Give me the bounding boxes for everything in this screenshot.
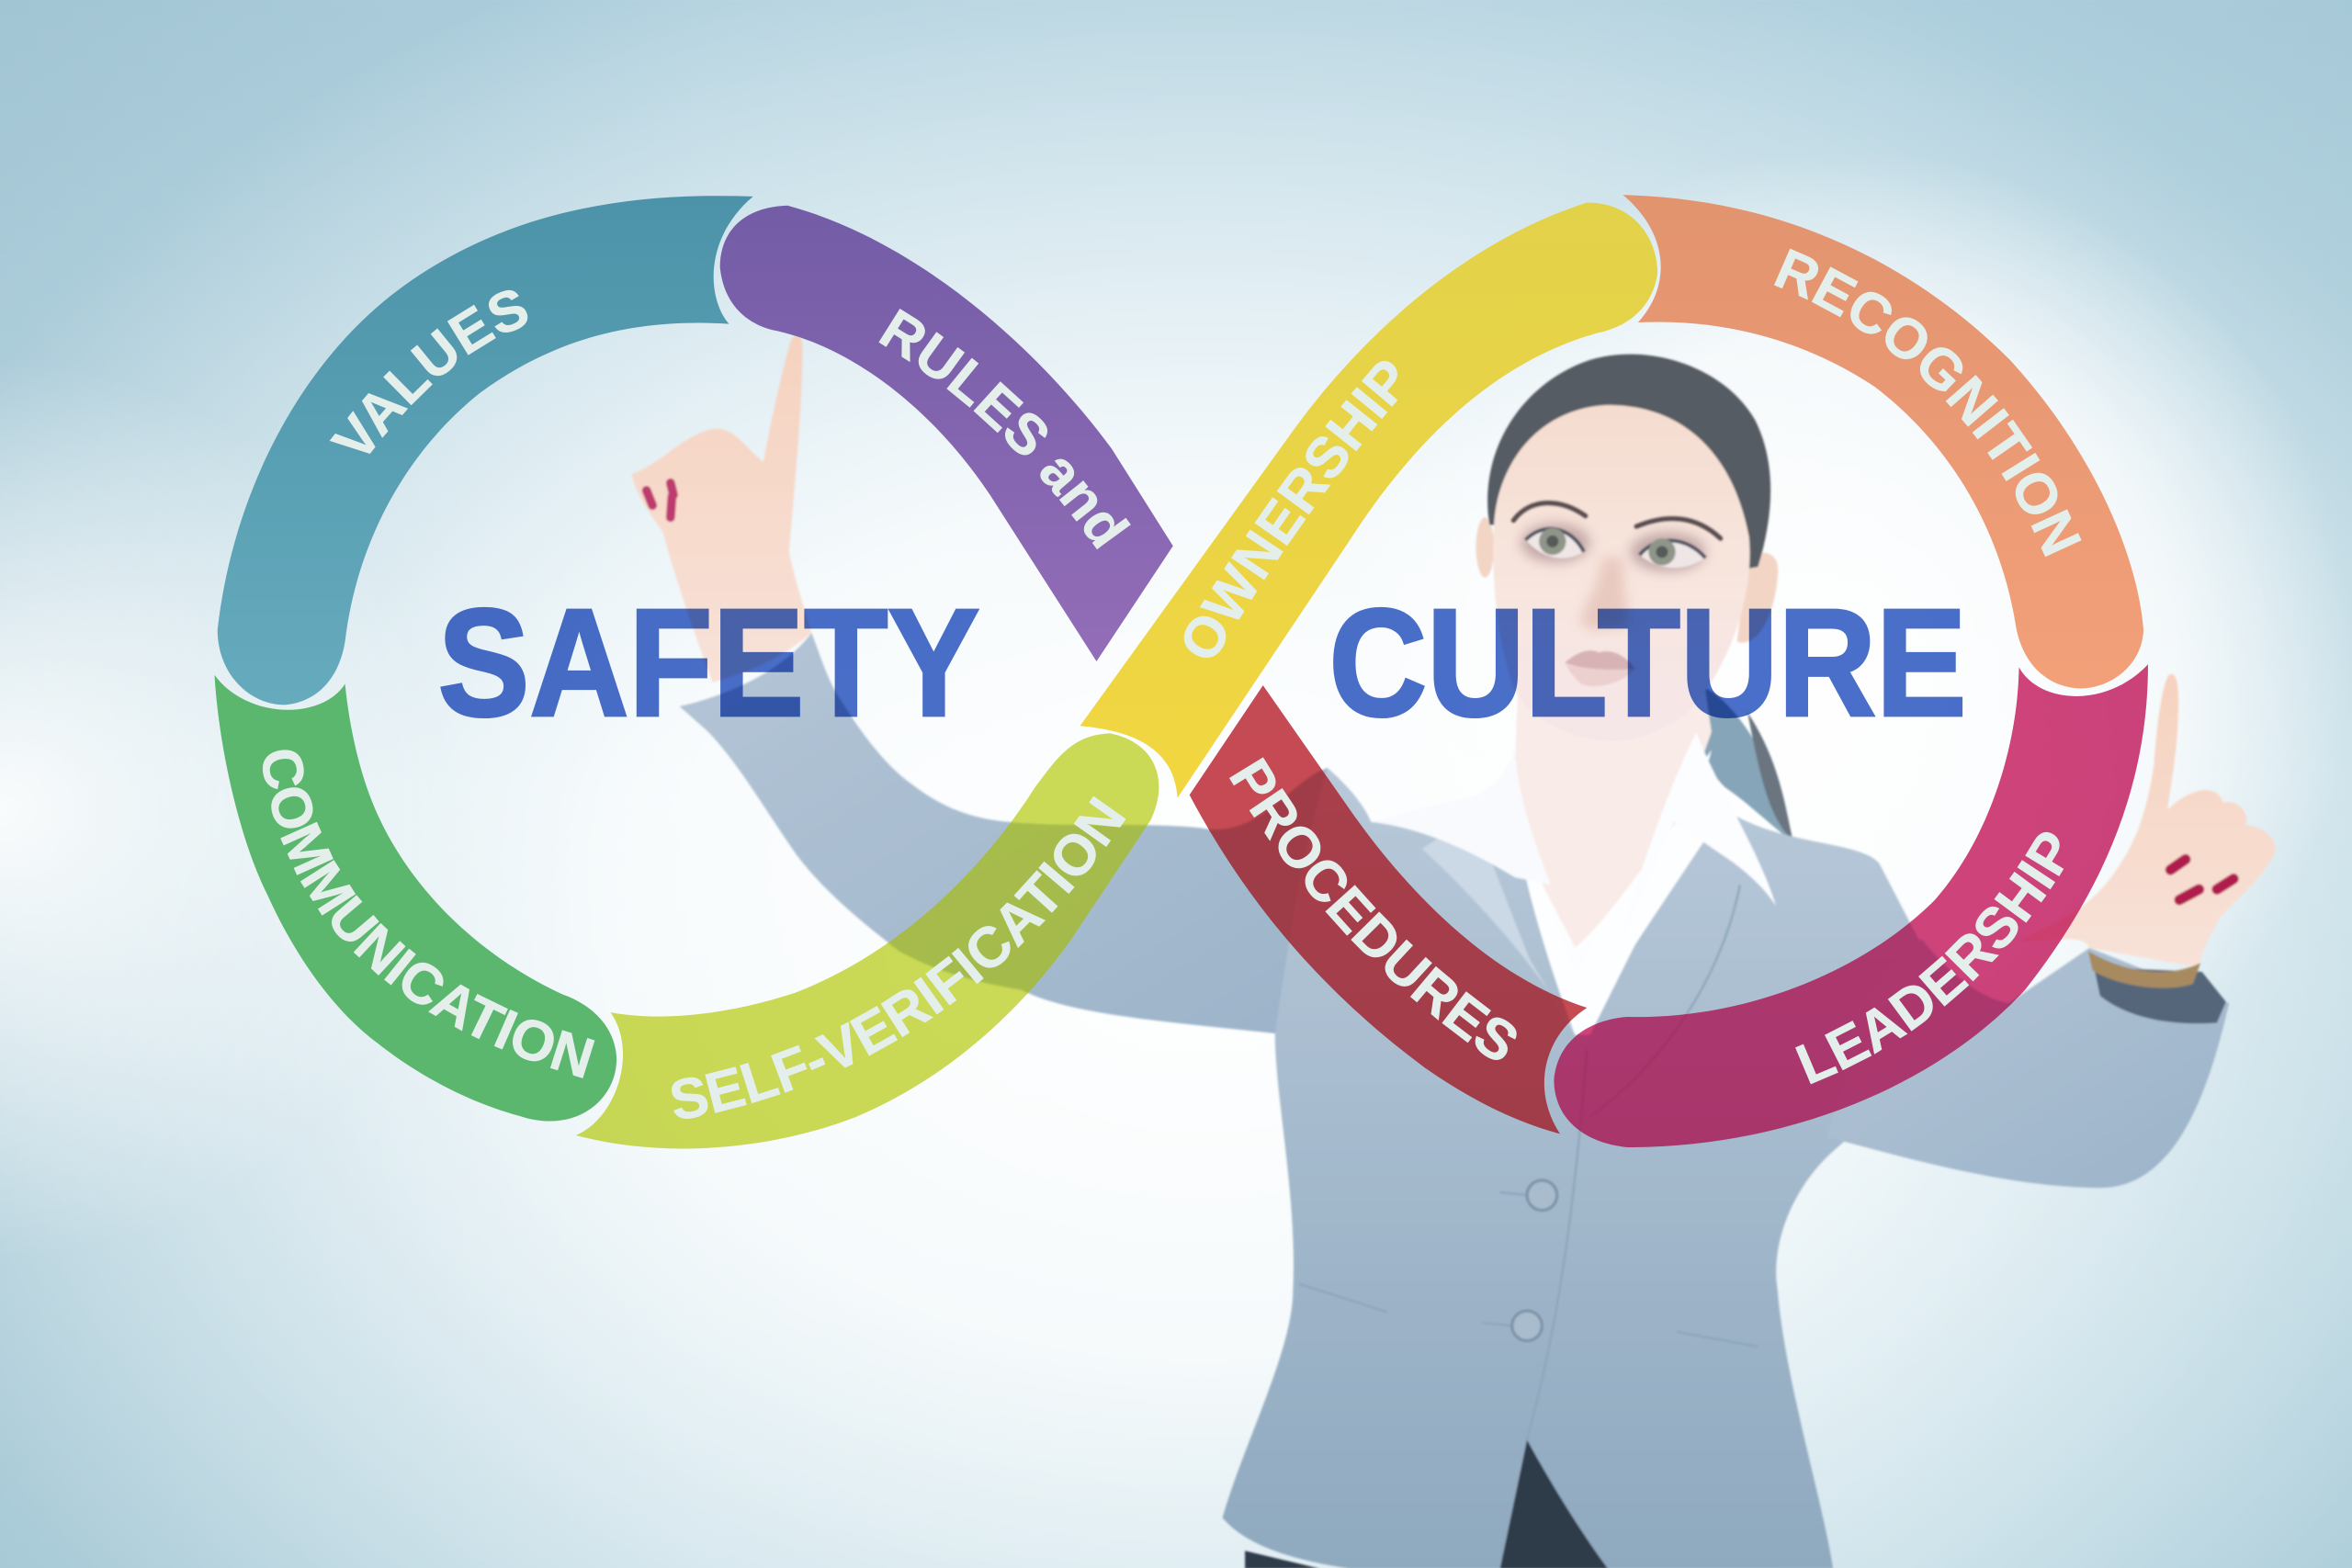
right collar bbox=[1614, 732, 1776, 960]
head: face bbox=[1493, 405, 1750, 741]
neck bbox=[1513, 682, 1712, 948]
ribbon: leadership bbox=[1517, 627, 2148, 1147]
left sleeve bbox=[680, 633, 1350, 1043]
ribbon: communication: COMMUNICATION bbox=[263, 750, 595, 1078]
title: culture: CULTURE bbox=[1329, 578, 1966, 749]
lips bbox=[1565, 650, 1635, 686]
eyes bbox=[1525, 528, 1705, 568]
ribbon: recognition: RECOGNITION bbox=[1774, 248, 2082, 557]
eye shadow bbox=[1521, 524, 1705, 571]
head: hair bbox=[1487, 355, 1770, 570]
ribbon: values: VALUES bbox=[329, 290, 527, 454]
shirt bbox=[1513, 750, 1712, 1035]
right hand bbox=[2019, 674, 2276, 967]
ribbon: recognition bbox=[1623, 195, 2144, 689]
ribbon: values bbox=[217, 196, 753, 705]
ribbon: procedures: PROCEDURES bbox=[1229, 757, 1517, 1060]
ribbon: leadership: LEADERSHIP bbox=[1795, 832, 2064, 1084]
wrist bracelet and cuff bbox=[2088, 951, 2226, 1023]
brows bbox=[1513, 503, 1721, 538]
right sleeve bbox=[1827, 939, 2229, 1188]
skirt bbox=[1500, 1439, 1608, 1568]
nose shadow bbox=[1580, 558, 1629, 629]
ribbon: procedures bbox=[1189, 685, 1588, 1134]
lapel highlights bbox=[1422, 818, 1575, 1035]
businesswoman photo illustration bbox=[631, 334, 2276, 1568]
ribbon: ownership: OWNERSHIP bbox=[1183, 360, 1398, 658]
ponytail and hair shadow bbox=[1693, 682, 1794, 843]
ribbon: communication bbox=[215, 674, 617, 1121]
ribbon: rules and bbox=[720, 206, 1173, 661]
jacket buttons bbox=[1512, 1180, 1557, 1341]
jacket details bbox=[1299, 885, 1758, 1439]
ribbon: self-verification: SELF-VERIFICATION bbox=[672, 795, 1126, 1119]
left collar bbox=[1371, 750, 1551, 885]
ribbon: rules and: RULES and bbox=[878, 309, 1131, 549]
ribbon: self-verification bbox=[576, 733, 1159, 1148]
torso jacket bbox=[1223, 768, 1950, 1568]
ribbon: ownership bbox=[1080, 202, 1657, 797]
head: ears bbox=[1476, 517, 1778, 643]
title: safety: SAFETY bbox=[438, 578, 979, 749]
left hand bbox=[631, 334, 811, 682]
